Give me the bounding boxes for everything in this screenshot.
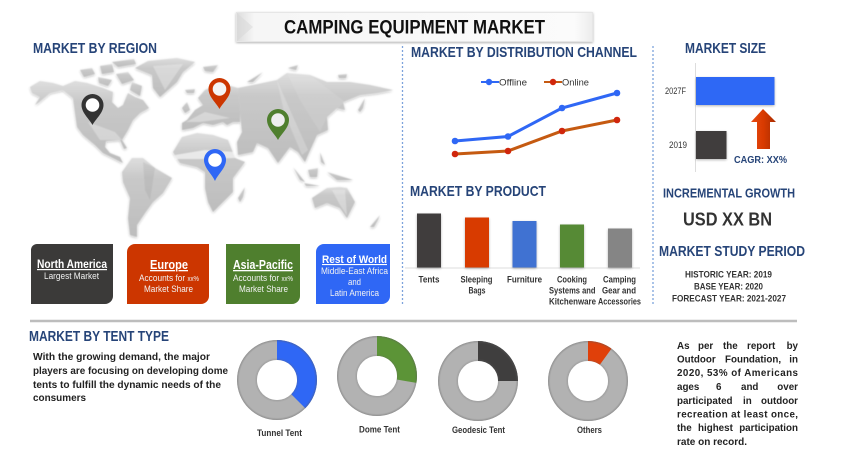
text block: outdoor foundation note: 2020, 53% of Americans bbox=[677, 368, 799, 379]
bar labels: Gear and bbox=[602, 286, 636, 296]
text block: outdoor foundation note: Outdoor bbox=[677, 354, 716, 366]
text block: outdoor foundation note: and bbox=[741, 382, 758, 393]
text block: outdoor foundation note: highest bbox=[698, 423, 734, 434]
text block: outdoor foundation note: the bbox=[677, 423, 692, 434]
CAGR label: CAGR: XX% bbox=[734, 154, 788, 166]
incremental growth block: USD XX BN bbox=[683, 210, 772, 230]
card: Europe: Market Share bbox=[144, 284, 193, 295]
text block: outdoor foundation note: participated bbox=[677, 396, 733, 407]
panel: market by product bbox=[405, 183, 641, 306]
market study period block: FORECAST YEAR: 2021-2027 bbox=[672, 294, 786, 304]
bar labels: Systems and bbox=[549, 286, 596, 296]
donut: tunnel tent bbox=[237, 340, 317, 420]
text block: outdoor foundation note: in bbox=[789, 354, 798, 366]
donut: others bbox=[548, 341, 628, 421]
card: Asia-Pacific: Asia-Pacific bbox=[233, 257, 293, 272]
card: Europe: Accounts for xx% bbox=[139, 273, 199, 284]
card: North America: Largest Market bbox=[44, 271, 99, 282]
chart legend bbox=[481, 78, 589, 88]
pin: Europe bbox=[208, 78, 230, 109]
text block: outdoor foundation note: rate on record. bbox=[677, 437, 747, 448]
panel: market by tent type bbox=[29, 328, 628, 438]
pin: North America bbox=[82, 94, 104, 125]
title banner: CAMPING EQUIPMENT MARKET bbox=[284, 18, 545, 38]
label: geodesic tent: Geodesic Tent bbox=[452, 425, 505, 435]
line chart: offline bbox=[452, 90, 620, 144]
intro text: tents to fulfill the dynamic needs of the bbox=[33, 379, 221, 391]
bar labels: Cooking bbox=[557, 274, 587, 284]
year labels bbox=[665, 86, 687, 150]
text block: outdoor foundation note: participation bbox=[739, 423, 798, 434]
title banner bbox=[236, 12, 592, 42]
bar chart bbox=[417, 214, 632, 268]
label: dome tent: Dome Tent bbox=[359, 424, 400, 434]
text block: outdoor foundation note: by bbox=[787, 341, 799, 352]
text block: outdoor foundation note bbox=[677, 341, 799, 448]
donut: geodesic tent bbox=[438, 341, 518, 421]
text block: outdoor foundation note: recreation at least once, bbox=[677, 410, 798, 420]
text block: outdoor foundation note: per bbox=[698, 341, 713, 352]
label: tunnel tent: Tunnel Tent bbox=[257, 428, 302, 438]
text block: outdoor foundation note: the bbox=[723, 341, 738, 352]
bar labels: Camping bbox=[603, 274, 636, 284]
card: Asia-Pacific: Market Share bbox=[239, 284, 288, 295]
bar labels: Kitchenware bbox=[549, 296, 596, 306]
text block: outdoor foundation note: report bbox=[747, 341, 776, 352]
bar labels: Bags bbox=[468, 286, 486, 296]
year labels: 2019 bbox=[669, 140, 687, 150]
bar labels: Accessories bbox=[598, 296, 641, 306]
heading: tent type: MARKET BY TENT TYPE bbox=[29, 328, 169, 345]
card: North America: North America bbox=[37, 257, 107, 271]
text block: outdoor foundation note: Foundation, bbox=[725, 354, 781, 366]
text block: outdoor foundation note: outdoor bbox=[761, 396, 798, 407]
bar labels: Sleeping bbox=[460, 274, 492, 284]
incremental growth block: INCREMENTAL GROWTH bbox=[663, 186, 795, 200]
label: others: Others bbox=[577, 425, 602, 435]
intro text: With the growing demand, the major bbox=[33, 351, 210, 363]
bar labels bbox=[418, 274, 641, 306]
card: Europe: Europe bbox=[150, 257, 188, 272]
card: Asia-Pacific bbox=[226, 244, 300, 304]
intro text: consumers bbox=[33, 392, 86, 404]
chart legend: Online bbox=[562, 78, 589, 88]
heading: product: MARKET BY PRODUCT bbox=[410, 183, 546, 200]
card: Rest of World: Latin America bbox=[330, 288, 380, 299]
card: Rest of World: and bbox=[348, 277, 361, 288]
heading: market size: MARKET SIZE bbox=[685, 40, 766, 57]
year labels: 2027F bbox=[665, 86, 686, 96]
card: Asia-Pacific: Accounts for xx% bbox=[233, 273, 293, 284]
text block: outdoor foundation note: over bbox=[777, 382, 798, 393]
heading: distribution channel: MARKET BY DISTRIBUTION CHANNEL bbox=[411, 44, 637, 61]
intro text: players are focusing on developing dome bbox=[33, 365, 228, 377]
map facets bbox=[88, 64, 347, 216]
arrow: growth bbox=[751, 109, 776, 149]
world map bbox=[30, 58, 393, 237]
line chart: online bbox=[452, 117, 620, 157]
market study period block: BASE YEAR: 2020 bbox=[694, 282, 763, 292]
panel: market by distribution channel bbox=[411, 44, 637, 157]
text block: outdoor foundation note: 6 bbox=[716, 382, 722, 393]
bar labels: Tents bbox=[418, 274, 440, 284]
bar labels: Furniture bbox=[507, 274, 542, 284]
market study period block: MARKET STUDY PERIOD bbox=[659, 243, 805, 260]
card: Europe bbox=[127, 244, 209, 304]
card: Rest of World bbox=[316, 244, 390, 304]
chart legend: Offline bbox=[499, 78, 527, 88]
pin: Rest of World bbox=[204, 149, 226, 181]
heading: market by region: MARKET BY REGION bbox=[33, 40, 157, 57]
text block: outdoor foundation note: in bbox=[743, 396, 752, 407]
card: Rest of World: Rest of World bbox=[322, 254, 387, 266]
market study period block bbox=[659, 243, 805, 304]
pin: Asia-Pacific bbox=[267, 109, 289, 140]
card: Rest of World: Middle-East Africa bbox=[321, 266, 389, 277]
market study period block: HISTORIC YEAR: 2019 bbox=[685, 270, 772, 280]
card: North America bbox=[31, 244, 113, 304]
intro text bbox=[33, 351, 228, 404]
panel: market by region bbox=[30, 40, 393, 304]
incremental growth block bbox=[663, 186, 795, 230]
text block: outdoor foundation note: As bbox=[677, 341, 690, 352]
donut: dome tent bbox=[337, 336, 417, 416]
panel: market size bbox=[665, 40, 788, 172]
market size bars bbox=[696, 77, 774, 159]
text block: outdoor foundation note: ages bbox=[677, 382, 700, 393]
